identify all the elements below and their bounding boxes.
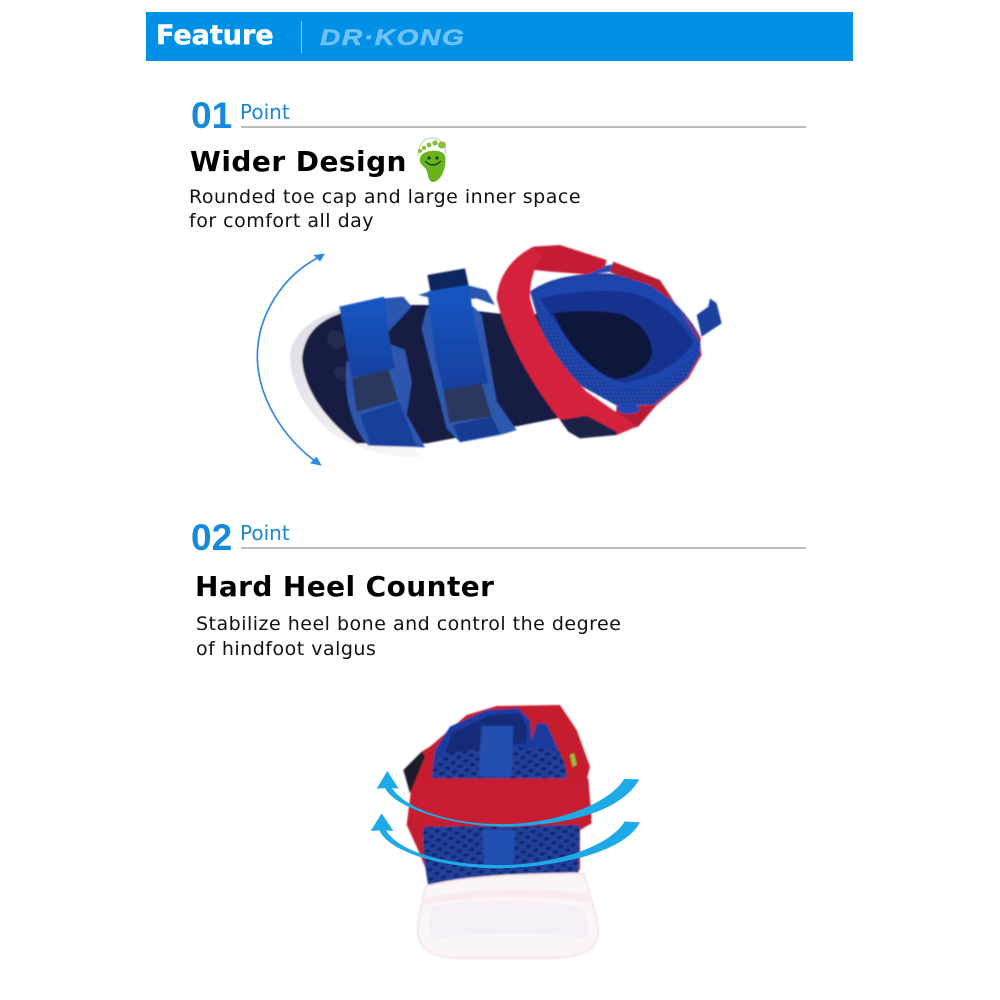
description: hard heel counter: Stabilize heel bone and control the degree (196, 613, 621, 635)
red ankle strap back (533, 245, 607, 274)
mid strap (418, 268, 517, 442)
rear sandal parts (403, 705, 598, 958)
heel cup rim (533, 277, 698, 389)
point 02 label: Point (240, 521, 290, 545)
inner dark (445, 713, 527, 755)
point 02 rule (241, 547, 806, 549)
icon: smiling green foot (418, 138, 446, 182)
heel tab (697, 298, 722, 337)
point 01 label: Point (240, 100, 290, 124)
description: wider design (189, 186, 581, 232)
mesh upper (432, 748, 567, 780)
toe strap underlay (383, 297, 412, 332)
blue lining (432, 708, 567, 778)
toe strap (339, 297, 425, 447)
pull tab (478, 726, 515, 867)
header banner (146, 12, 853, 61)
heading: wider design: Wider Design (190, 145, 407, 178)
curved arrow (257, 254, 325, 466)
header divider (301, 21, 302, 53)
sole ledge shade (425, 889, 590, 905)
red strap (497, 247, 637, 435)
sole textured panel (429, 901, 588, 940)
header title: Feature (156, 20, 274, 51)
lower mesh (423, 825, 580, 887)
red collar (407, 705, 592, 870)
point 01 number: 01 (191, 95, 232, 136)
description: wider design: for comfort all day (189, 210, 374, 232)
heel insole (553, 311, 652, 379)
point 01 rule (241, 126, 806, 128)
description: hard heel counter: of hindfoot valgus (196, 638, 376, 660)
strap tip logo patch (560, 416, 617, 438)
left dark strap (403, 752, 425, 793)
heading: hard heel counter: Hard Heel Counter (195, 570, 494, 603)
point 02 number: 02 (191, 517, 232, 558)
upper arrow (377, 771, 639, 827)
insole (302, 305, 573, 443)
green insole glimpse (570, 753, 577, 767)
white sole (418, 873, 598, 958)
sandal sole (290, 310, 423, 459)
red heel strap (410, 778, 592, 827)
brand logo: DR·KONG (320, 25, 465, 50)
buckle (617, 404, 640, 414)
lower arrow (371, 813, 640, 868)
toe impressions (327, 330, 347, 380)
description: hard heel counter (196, 613, 621, 660)
blue loop (587, 263, 617, 274)
heel cup outer (530, 273, 701, 406)
heel cup inner (540, 291, 693, 382)
description: wider design: Rounded toe cap and large inner space (189, 186, 581, 208)
sandal parts (290, 245, 722, 459)
